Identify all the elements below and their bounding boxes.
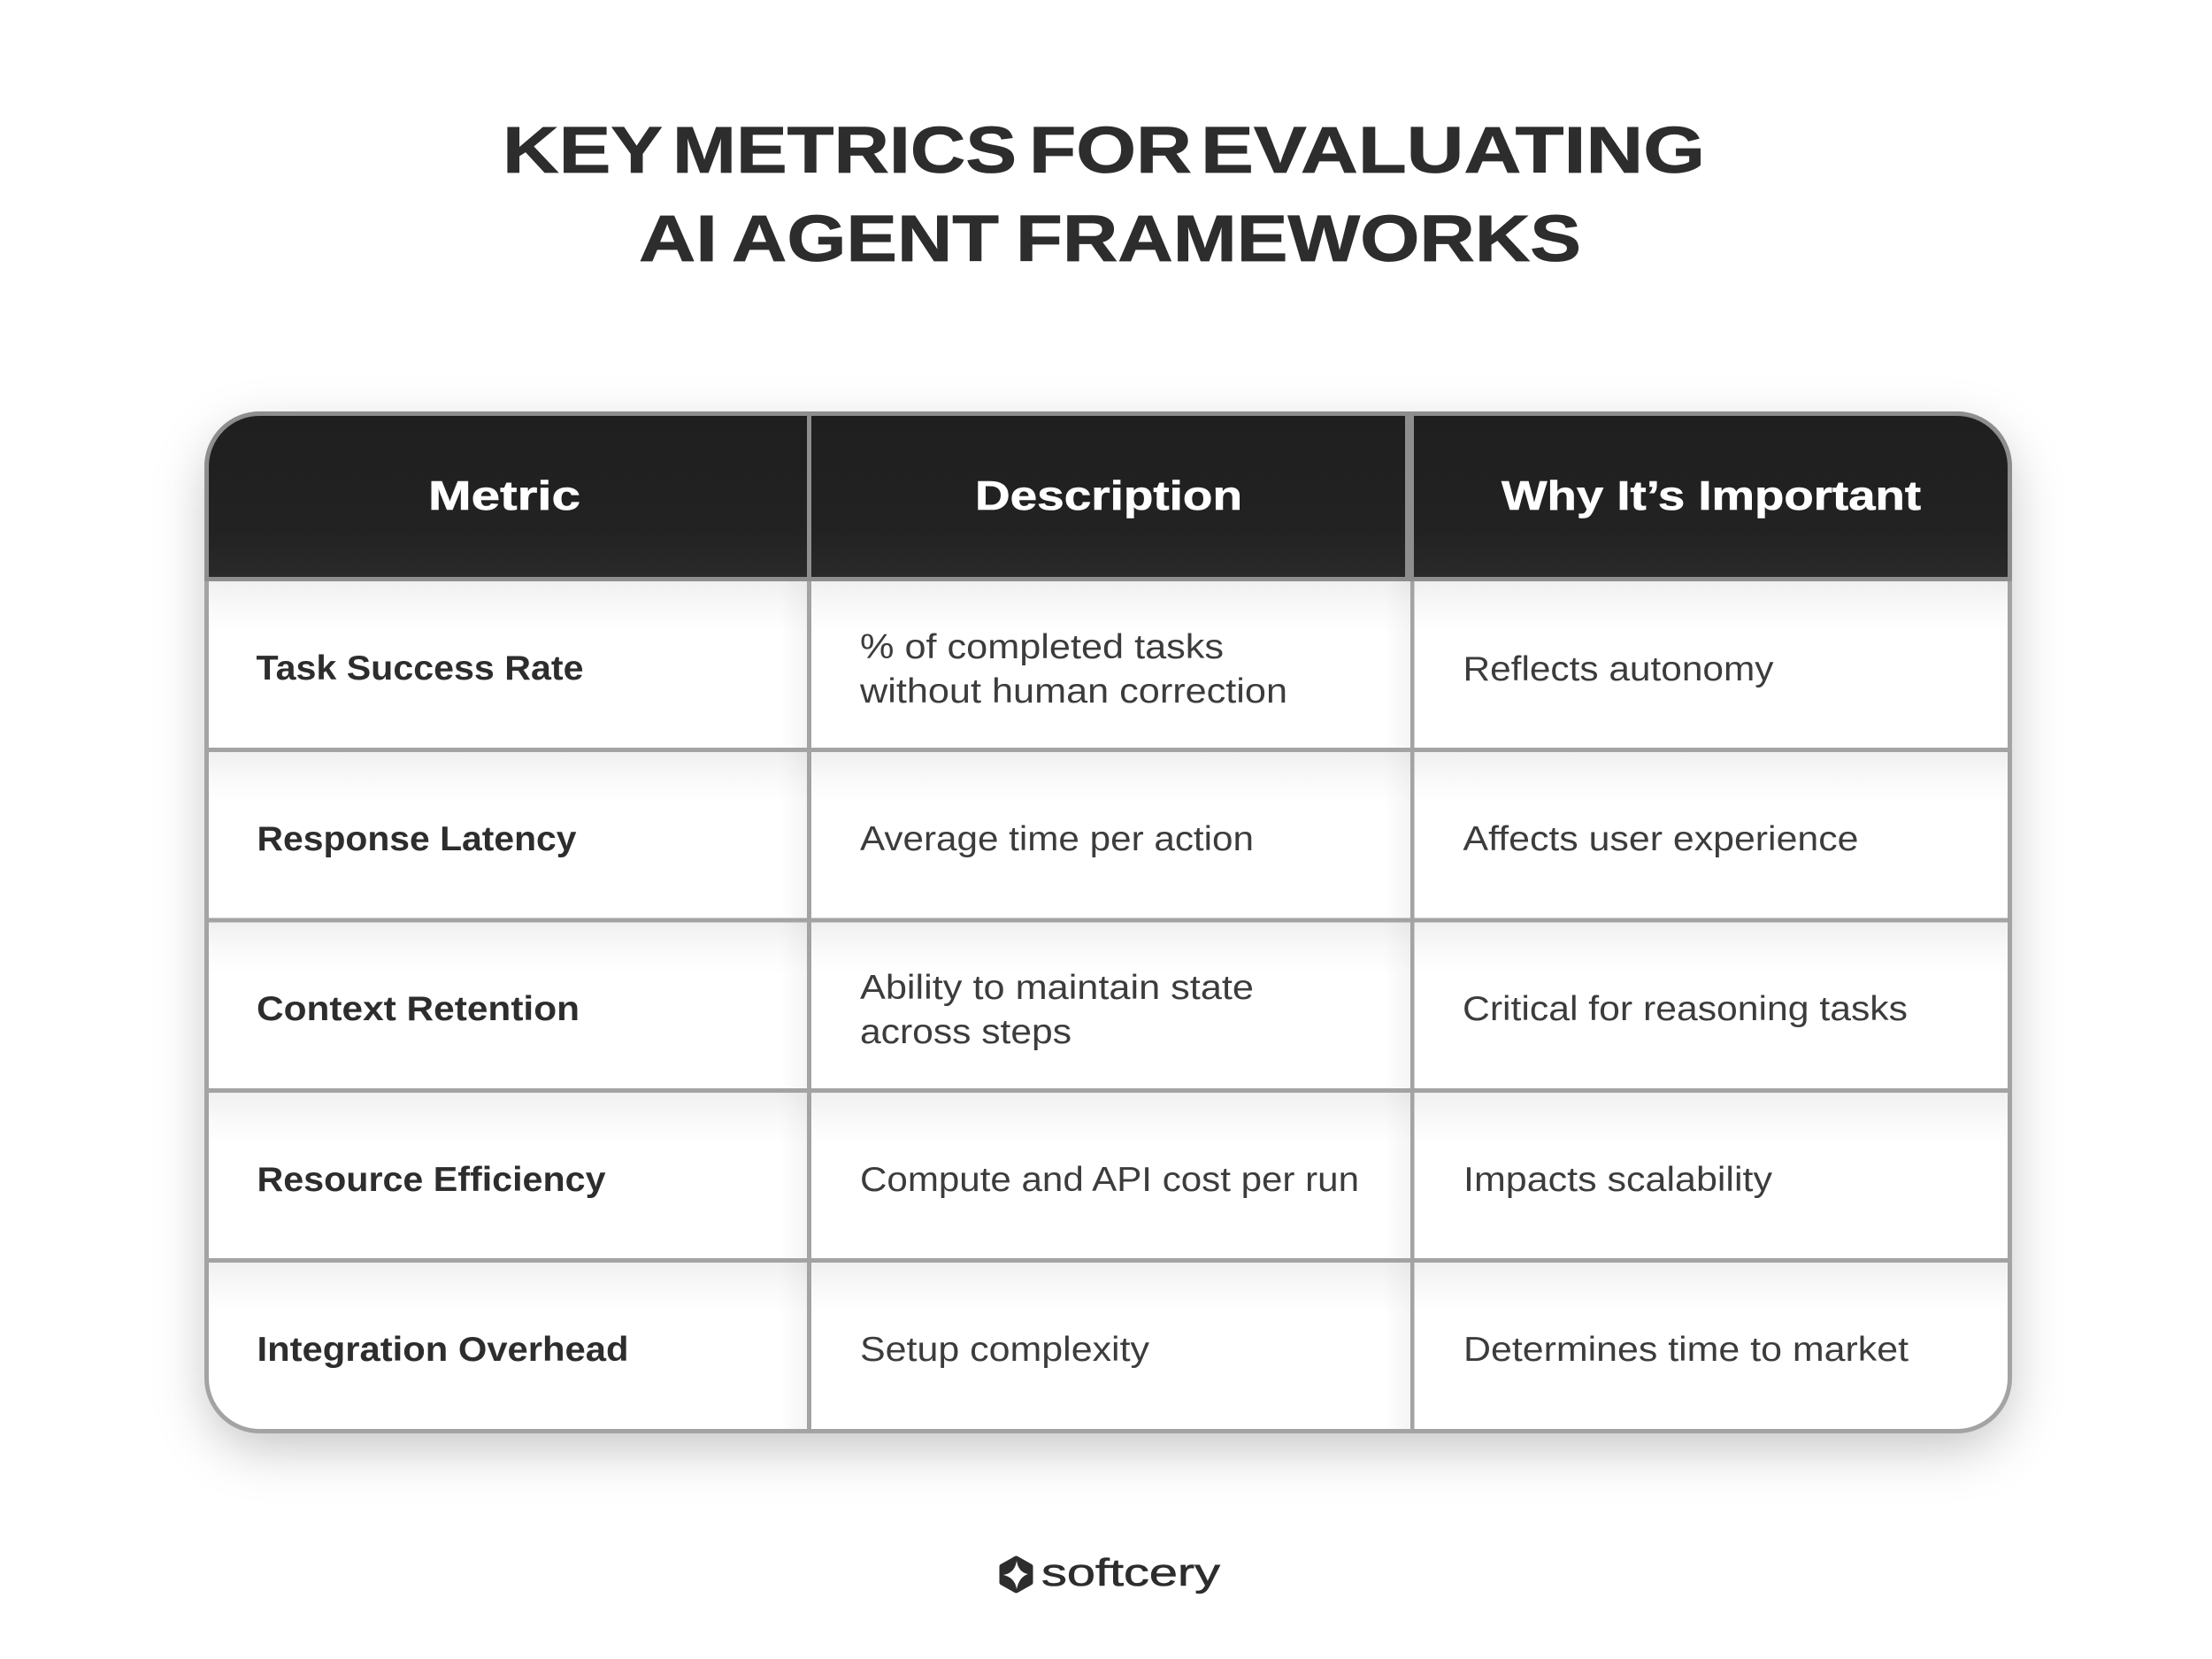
row: Resource Efficiency: Compute and API cost per run <box>860 1161 1359 1199</box>
header: Metric: Metric <box>428 472 580 518</box>
header: Why It's Important: Why It’s Important <box>1502 472 1921 518</box>
row: Context Retention: Ability to maintain state <box>860 969 1254 1007</box>
header row <box>207 414 2010 579</box>
row: Resource Efficiency: Impacts scalability <box>1463 1161 1773 1199</box>
title: FOR <box>1029 113 1192 187</box>
title: AI <box>639 202 718 275</box>
row: Task Success Rate <box>257 628 1774 710</box>
logo: softcery <box>1002 1551 1220 1594</box>
row: Task Success Rate: % of completed tasks <box>860 628 1224 666</box>
table drop shadow <box>209 434 2008 1447</box>
row: Response Latency: Average time per action <box>860 820 1254 858</box>
row: Task Success Rate: without human correction <box>859 672 1287 710</box>
row: Resource Efficiency <box>257 1161 1773 1199</box>
table body background <box>207 414 2010 1432</box>
wordmark: softcery <box>1041 1551 1220 1594</box>
row: Context Retention: across steps <box>860 1013 1071 1051</box>
table outer border <box>207 414 2010 1432</box>
header: Description: Description <box>975 472 1242 518</box>
row: Context Retention: Critical for reasoning tasks <box>1463 990 1908 1028</box>
title: AGENT <box>732 202 999 275</box>
title: METRICS <box>672 113 1017 187</box>
title: FRAMEWORKS <box>1016 202 1581 275</box>
row: Integration Overhead <box>257 1331 1909 1369</box>
row: Response Latency <box>257 820 1858 858</box>
row and column soft shading <box>209 581 2008 1429</box>
row: Resource Efficiency: Resource Efficiency <box>257 1161 606 1199</box>
icon: hexagon with star <box>1002 1559 1030 1591</box>
row: Task Success Rate: Reflects autonomy <box>1463 650 1774 688</box>
row: Context Retention <box>257 969 1908 1051</box>
row: Integration Overhead: Determines time to market <box>1463 1331 1909 1369</box>
table grid lines <box>209 577 2008 1431</box>
row: Integration Overhead: Integration Overhead <box>257 1331 628 1369</box>
title: KEY <box>503 113 663 187</box>
row: Integration Overhead: Setup complexity <box>860 1331 1150 1369</box>
row: Response Latency: Response Latency <box>257 820 577 858</box>
row: Context Retention: Context Retention <box>257 990 580 1028</box>
panel: metrics table <box>207 414 2010 1447</box>
row: Response Latency: Affects user experience <box>1463 820 1858 858</box>
title <box>503 113 1705 275</box>
title: EVALUATING <box>1201 113 1705 187</box>
row: Task Success Rate: Task Success Rate <box>257 649 584 687</box>
